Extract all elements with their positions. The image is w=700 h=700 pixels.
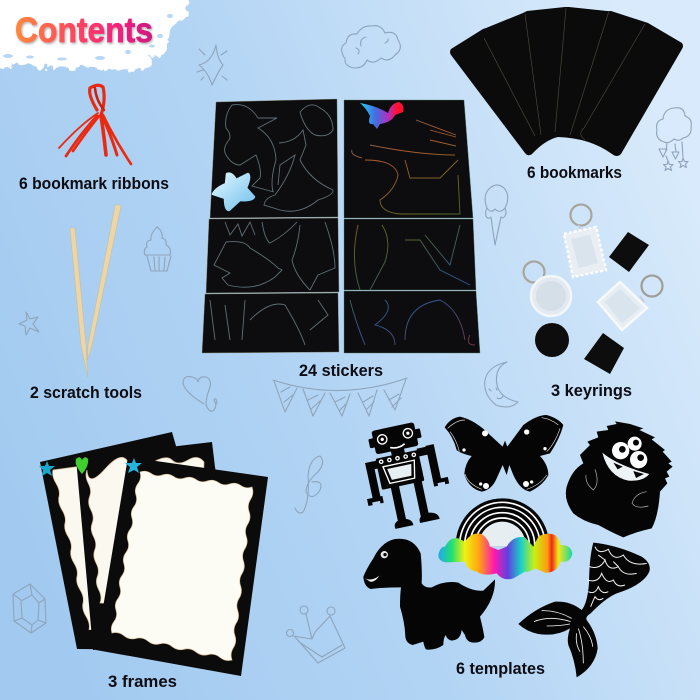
label: 3 frames: 3 frames xyxy=(108,672,177,691)
label: 3 keyrings: 3 keyrings xyxy=(551,381,632,400)
template: rainbow xyxy=(456,498,548,547)
doodle: crown xyxy=(286,606,345,663)
item: keyrings xyxy=(524,204,662,374)
template: monster xyxy=(566,421,673,537)
label: 6 bookmark ribbons: 6 bookmark ribbons xyxy=(19,174,169,193)
star on front frame xyxy=(125,458,142,473)
item: scratch tools xyxy=(70,204,121,377)
doodle: cupcake xyxy=(144,227,171,271)
template: rainbow cloud xyxy=(438,534,572,579)
sticker outlines right column xyxy=(350,120,475,345)
heart on middle frame xyxy=(76,457,88,474)
doodle: sparkle xyxy=(197,45,227,85)
rectangular keyring xyxy=(564,204,606,277)
doodle: cloud xyxy=(342,26,400,68)
square keyring xyxy=(598,276,662,330)
label: 2 scratch tools: 2 scratch tools xyxy=(30,383,142,402)
middle frame xyxy=(76,442,245,650)
label: 6 bookmarks: 6 bookmarks xyxy=(527,163,622,182)
label: 24 stickers: 24 stickers xyxy=(299,361,383,380)
bird sticker xyxy=(360,102,404,129)
black square insert xyxy=(584,333,624,374)
black circle insert xyxy=(535,323,569,357)
back frame opening xyxy=(53,462,112,630)
item: frames xyxy=(39,432,268,676)
brush stroke behind title xyxy=(0,0,192,72)
doodle: bunting xyxy=(273,378,407,416)
doodle: moon xyxy=(485,362,518,407)
sticker outlines left column xyxy=(210,105,335,345)
sticker sheets right column xyxy=(344,100,480,353)
bookmark dividers xyxy=(484,8,645,140)
panel: stickers xyxy=(202,99,480,353)
doodle: gem xyxy=(13,584,46,633)
doodle: ice cream xyxy=(485,185,508,245)
bookmark fan xyxy=(450,7,683,156)
template: mermaid tail xyxy=(518,543,650,677)
black rectangle insert xyxy=(609,232,649,272)
doodle: heart and swirl xyxy=(183,377,217,411)
star sticker xyxy=(213,174,254,210)
doodle: treble clef xyxy=(295,456,323,513)
template: dinosaur xyxy=(363,539,495,650)
item: bookmark ribbons xyxy=(59,85,131,164)
item: templates xyxy=(353,415,673,677)
item: bookmarks xyxy=(450,7,683,156)
front frame opening xyxy=(111,471,253,661)
star on back frame xyxy=(39,461,55,476)
template: butterfly xyxy=(445,415,563,492)
round keyring xyxy=(524,262,571,316)
middle frame opening xyxy=(86,457,204,605)
doodle: star xyxy=(19,312,39,335)
back frame xyxy=(40,432,225,650)
front frame xyxy=(96,457,268,676)
sticker sheets left column xyxy=(202,99,339,353)
title: Contents xyxy=(15,11,153,50)
dinosaur eye and smile xyxy=(365,551,388,582)
label: 6 templates: 6 templates xyxy=(456,659,545,678)
template: robot xyxy=(353,418,456,533)
doodle: cloud with hearts and stars xyxy=(657,108,691,170)
